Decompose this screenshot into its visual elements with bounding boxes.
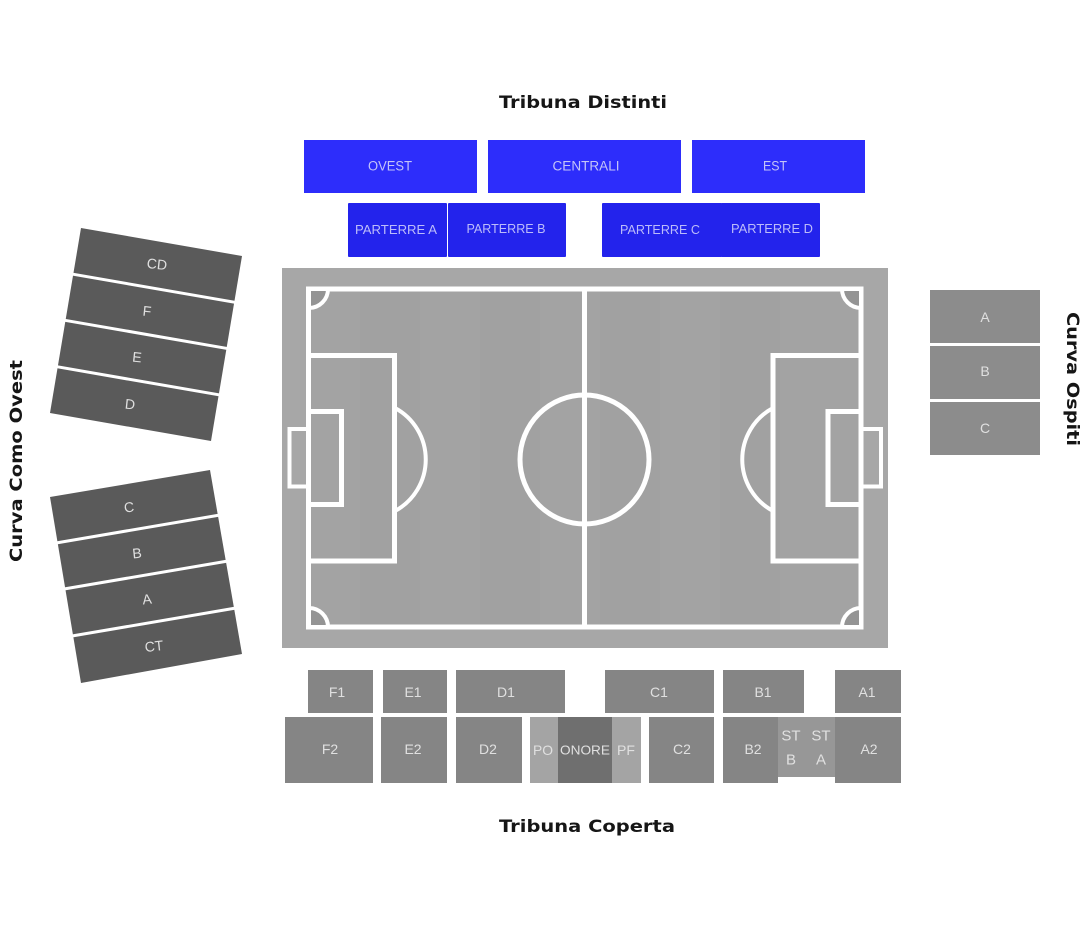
sector: Parterre C: PARTERRE C (620, 223, 700, 237)
sector: F2 (285, 717, 373, 783)
sector: ST B: B (786, 752, 796, 768)
sector: A: A (980, 309, 990, 325)
heading: Curva Como Ovest: Curva Como Ovest (7, 360, 26, 562)
label: B: B (132, 545, 142, 561)
sector: F1 (308, 670, 373, 713)
panel: Curva Como lower block (50, 470, 242, 683)
sector: C: C (980, 420, 990, 436)
sector: B1 (723, 670, 804, 713)
sector: C2: C2 (673, 741, 691, 757)
panel: parterre sectors (348, 203, 820, 257)
label: A: A (142, 590, 153, 607)
sector: E1: E1 (404, 684, 422, 700)
sector: D2: D2 (479, 741, 497, 757)
sector: Parterre A (348, 203, 447, 257)
sector: ST B (778, 717, 807, 777)
panel: Tribuna Coperta upper row (308, 670, 901, 713)
halfway line (582, 289, 587, 627)
sector: ST A: A (816, 752, 826, 768)
label: D: D (124, 396, 136, 412)
sector: ST A (807, 717, 835, 777)
sector: B1: B1 (754, 684, 772, 700)
sector: B: B (980, 363, 990, 379)
label: F: F (142, 303, 152, 319)
panel: Tribuna Coperta lower row (285, 717, 901, 783)
sector: A (930, 290, 1040, 343)
sector: D2 (456, 717, 522, 783)
label: CT: CT (144, 637, 165, 655)
label: CD: CD (146, 255, 168, 273)
sector: C1 (605, 670, 714, 713)
label: E: E (132, 349, 142, 365)
sector: Onore (558, 717, 612, 783)
sector: C (930, 402, 1040, 455)
sector: A2: A2 (860, 741, 878, 757)
sector: C1: C1 (650, 684, 668, 700)
sector: B (930, 346, 1040, 399)
heading: Tribuna Coperta: Tribuna Coperta (499, 817, 675, 836)
sector: PF (612, 717, 641, 783)
label: C: C (123, 499, 135, 515)
sector: Centrali (488, 140, 681, 193)
sector: PO (530, 717, 558, 783)
sector: Centrali: CENTRALI (552, 158, 620, 174)
sector: F2: F2 (322, 741, 338, 757)
sector: Parterre D (721, 203, 820, 257)
sector: Est: EST (763, 158, 787, 174)
sector: Parterre B: PARTERRE B (466, 222, 546, 236)
left penalty area (290, 356, 426, 561)
sector: ST B: ST (781, 728, 801, 744)
sector: ST A: ST (811, 728, 831, 744)
heading: Curva Ospiti: Curva Ospiti (1063, 312, 1082, 446)
sector: C2 (649, 717, 714, 783)
sector: Parterre D: PARTERRE D (731, 222, 813, 236)
pitch outline (308, 289, 861, 627)
sector: F1: F1 (329, 684, 345, 700)
sector: A1 (835, 670, 901, 713)
sector: B2 (723, 717, 778, 783)
sector: D1 (456, 670, 565, 713)
panel: upper blue sectors (304, 140, 865, 193)
sector: Parterre C (602, 203, 722, 257)
sector: B2: B2 (744, 741, 762, 757)
sector: A1: A1 (858, 684, 876, 700)
sector: A2 (835, 717, 901, 783)
sector: E1 (383, 670, 447, 713)
sector: E2 (381, 717, 447, 783)
sector: Parterre B (448, 203, 566, 257)
sector: E2: E2 (404, 741, 422, 757)
panel: Curva Ospiti sectors (930, 290, 1040, 455)
sector: Est (692, 140, 865, 193)
corner arcs (309, 289, 861, 627)
sector: Parterre A: PARTERRE A (355, 223, 438, 237)
sector: Ovest: OVEST (368, 158, 412, 174)
centre circle (520, 395, 649, 524)
sector: Onore: ONORE (560, 742, 610, 758)
right penalty area (742, 356, 881, 561)
sector: PF: PF (617, 742, 635, 758)
panel: football pitch (282, 268, 888, 648)
sector: Ovest (304, 140, 477, 193)
sector: D1: D1 (497, 684, 515, 700)
panel: Curva Como upper block (50, 228, 242, 441)
heading: Tribuna Distinti: Tribuna Distinti (499, 93, 667, 112)
sector: PO: PO (533, 742, 553, 758)
